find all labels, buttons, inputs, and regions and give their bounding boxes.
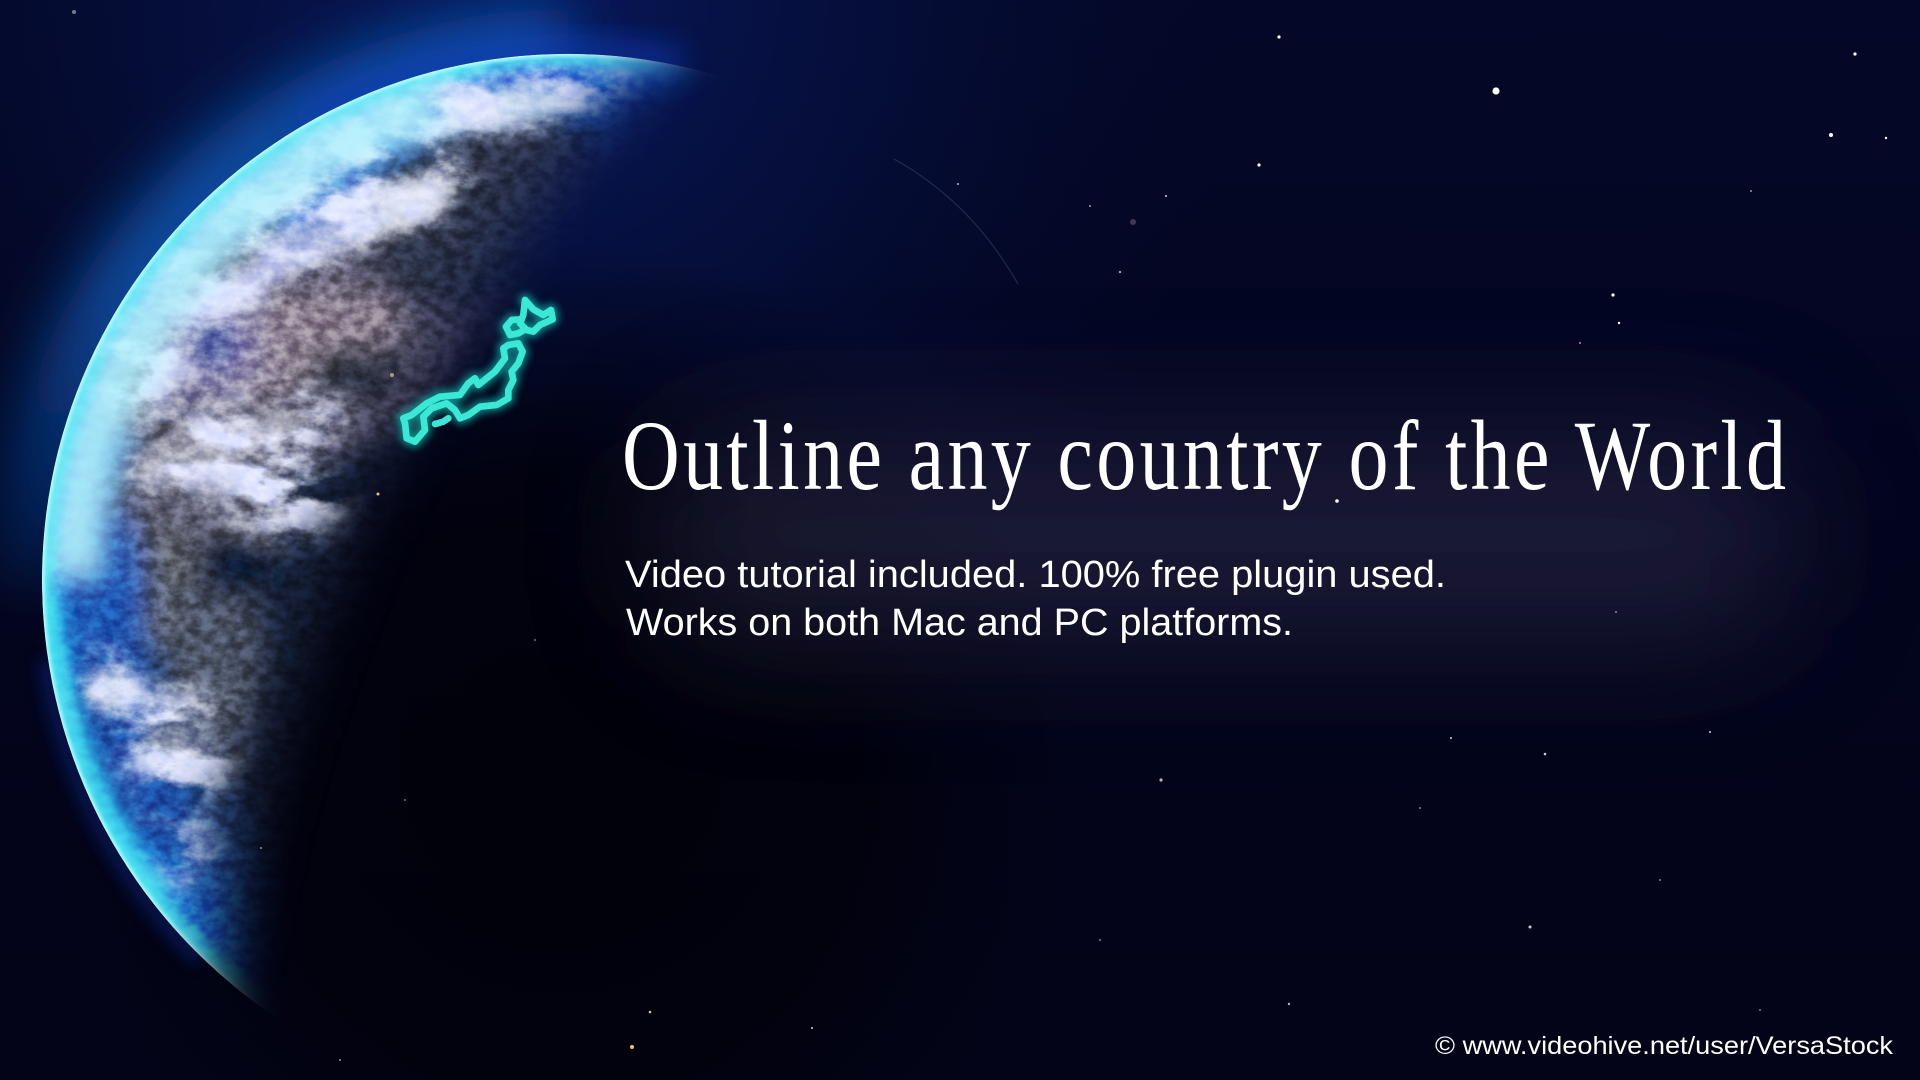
japan outline <box>403 300 553 442</box>
land masses <box>50 111 601 862</box>
earth globe <box>42 54 706 1008</box>
earth atmosphere halo <box>42 54 680 960</box>
japan outer glow <box>403 300 553 442</box>
subtitle line 1: Video tutorial included. 100% free plugin used. <box>625 554 1446 596</box>
subtitle text <box>625 554 1446 644</box>
copyright credit: © www.videohive.net/user/VersaStock <box>1435 1032 1894 1060</box>
terrain relief <box>44 54 652 966</box>
bright upper limb band <box>73 102 440 580</box>
text backdrop glow <box>660 430 1790 640</box>
japan outline stroke <box>403 300 553 442</box>
solid cloud bands <box>84 62 660 775</box>
shooting star streak <box>894 159 1018 284</box>
cloud noise <box>62 58 639 904</box>
cyan lower limb band <box>54 600 166 897</box>
subtitle line 2: Works on both Mac and PC platforms. <box>626 602 1293 644</box>
earth base ocean <box>42 54 688 992</box>
night city lights <box>260 373 651 1049</box>
limb rim light <box>42 54 692 994</box>
title: Outline any country of the World <box>622 400 1786 511</box>
